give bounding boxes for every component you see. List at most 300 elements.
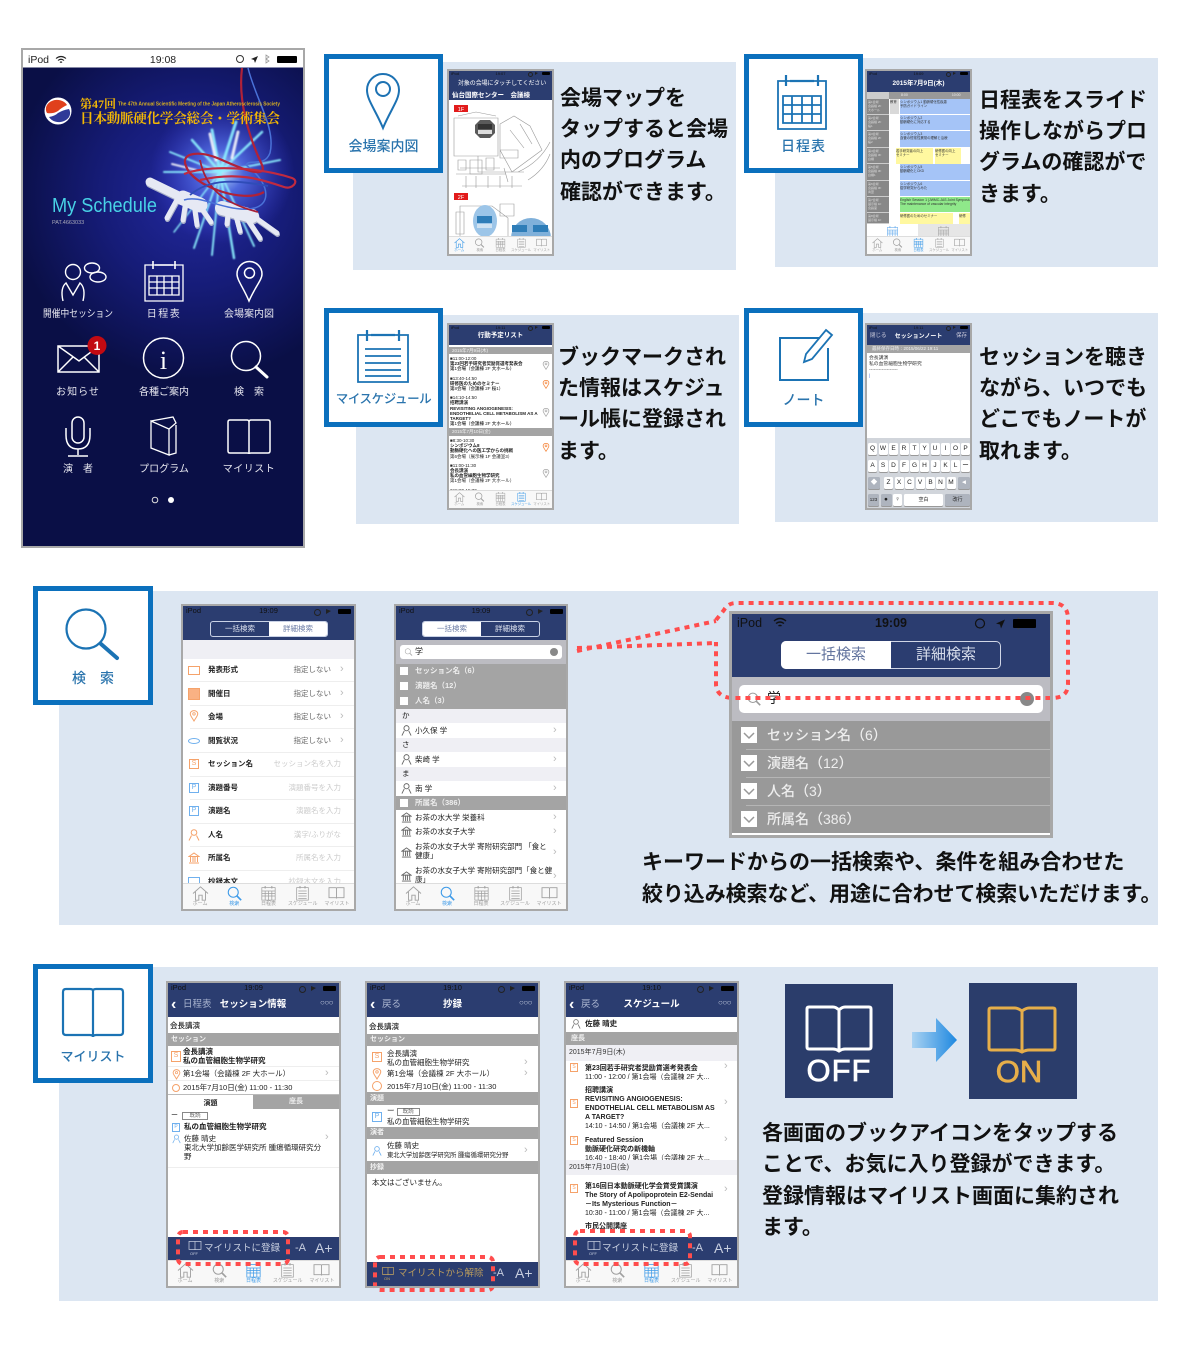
phone: venue map screen [447,69,554,256]
phone: timetable screen: 研修 [959,214,966,218]
panel: notes [775,313,1158,522]
icon: mail with badge: 1 [94,339,101,353]
phone: notes screen: ------------------ [869,368,898,373]
icon: search [232,342,267,377]
phone: speaker schedule screen: 10:30 - 11:00 / 第1会場（会議棟 2F 大... [585,1210,709,1217]
phone: notes screen: B [928,479,933,486]
text: timetable description [979,88,1147,206]
phone: abstract screen: › [524,1056,528,1068]
phone: detailed search screen: マイリスト [324,901,349,907]
phone: notes screen: O [953,445,958,452]
phone: timetable screen: 第6会場 [868,182,879,186]
phone: keyword search screen: 健康」 [415,851,438,860]
icon box: timetable [744,54,863,173]
phone: session info screen: 日程表 [183,999,212,1010]
phone: detailed search screen: 指定しない [294,712,331,721]
status bar: iPod [28,54,49,66]
phone: detailed search screen: 演題名 [208,806,230,815]
phone: timetable screen: 日程表 [913,248,924,252]
phone: my schedule screen: 2015年7月10日(金) [452,429,491,434]
phone: speaker schedule screen: 16:40 - 18:40 / 第1会場（会議棟 2F 大... [585,1155,710,1162]
phone: my schedule screen: 行動予定リスト [478,332,523,339]
phone: timetable screen: 白橿1 [868,173,876,177]
phone: venue map screen: 19:07 [495,71,506,76]
phone: notes screen: C [907,479,912,486]
phone: detailed search screen: 開催日 [208,689,230,698]
phone: detailed search screen: 指定しない [294,665,331,674]
icon: bookmark off [785,984,893,1098]
phone: my schedule screen: 研修医のためのセミナー [450,381,500,386]
phone: notes screen: X [897,479,901,486]
phone: timetable screen: 8:00 10:00 [901,93,961,97]
phone: timetable screen: 動脈硬化とCKD [900,169,924,173]
phone: timetable screen: 研修医のためのセミナー [900,214,937,218]
phone: speaker schedule screen: 第16回日本動脈硬化学会賞受賞講演 [585,1183,698,1190]
icon: program booklet [151,417,176,455]
phone: detailed search screen: S [192,760,196,767]
enlarged search screen: 人名（3） [767,783,831,799]
phone: timetable screen: シンポジウム5 [900,164,922,168]
phone: speaker schedule screen: マイリスト [707,1278,732,1284]
phone: timetable screen: シンポジウム3 [900,132,922,136]
phone: speaker schedule screen: The Story of Apolipoprotein E2-Sendai [585,1192,713,1199]
phone: notes screen [865,323,972,510]
phone: notes screen: T [912,445,916,452]
phone: my schedule screen: TARGET? [450,416,471,421]
phone: detailed search screen: P [192,807,196,814]
phone: detailed search screen: 発表形式 [208,665,238,674]
text: my schedule description [558,346,726,463]
phone: my schedule screen: ENDOTHELIAL CELL METABOLISM AS A [450,411,538,416]
phone: abstract screen: A+ [515,1265,533,1281]
icon box: my schedule [324,308,443,427]
phone: my schedule screen: ■15:00-15:30 [450,488,477,493]
phone: session info screen: 演題 [204,1100,218,1107]
phone: notes screen: P [963,445,968,452]
panel: search [59,591,1158,925]
phone: keyword search screen: さ [402,740,410,749]
phone: my schedule screen: シンポジウム8 [450,443,480,448]
phone: detailed search screen: スケジュール [288,901,318,907]
phone: session info screen: 19:09 [244,983,263,992]
phone: session info screen: 会長講演 [170,1021,200,1030]
phone: notes screen: Y [922,445,927,452]
text: venue map description: 確認ができます。 [560,181,726,204]
phone: notes screen: S [881,462,885,469]
phone: keyword search screen: ま [402,769,410,778]
phone: abstract screen: P [375,1113,379,1120]
phone: speaker schedule screen: › [724,1133,728,1145]
text: my list description: ことで、お気に入り登録ができます。 [762,1153,1115,1176]
icon box: my schedule: マイスケジュール [336,392,431,406]
phone: speaker schedule screen: スケジュール [671,1278,701,1284]
phone: speaker schedule screen: ホーム [576,1278,591,1284]
phone: timetable screen: 会議棟 2F [868,104,881,108]
phone: timetable screen: 第5会場 [868,165,879,169]
phone: venue map screen: 1F [458,107,465,113]
phone: detailed search screen: 会場 [208,712,223,721]
phone: notes screen: セッションノート [895,334,942,340]
phone: speaker schedule screen: -A [692,1242,703,1254]
phone: abstract screen: ー 既読 [387,1106,414,1115]
label: 検 索 [234,385,264,398]
phone: notes screen: ◆ [871,479,877,486]
phone: my schedule screen: 19:11 [496,325,505,330]
phone: timetable screen: 2015年7月9日(木) [892,80,945,87]
icon box: notes [744,308,863,427]
phone: detailed search screen [181,604,356,911]
phone: abstract screen: › [524,1144,528,1156]
label: 日程表 [147,308,181,320]
phone: timetable screen: 会議棟 3F [868,186,881,190]
phone: my schedule screen: 動脈硬化への医工学からの挑戦 [450,448,513,453]
icon box: search [33,586,153,705]
phone: session info screen: 野 [184,1152,192,1161]
phone: notes screen: 19:11 [914,325,923,330]
phone: abstract screen [365,981,540,1288]
phone: my schedule screen: ■8:30-10:30 [450,438,474,443]
phone: notes screen: 123 [870,497,877,502]
text: timetable description: きます。 [979,183,1061,206]
phone: speaker schedule screen: スケジュール [623,999,680,1010]
phone: venue map screen: 2F [458,195,465,201]
text: notes description [979,346,1147,463]
phone: notes screen: N [938,479,943,486]
phone: my schedule screen: REVISITING ANGIOGENESIS: [450,406,513,411]
phone: abstract screen: 19:10 [443,983,462,992]
phone: notes screen: G [912,462,917,469]
text: notes description: 取れます。 [979,440,1082,463]
phone: session info screen: ー [171,1112,178,1119]
phone: speaker schedule screen: S [572,1185,576,1191]
phone: speaker schedule screen: 戻る [581,999,600,1010]
label: 開催中セッション [43,307,113,320]
phone: abstract screen: セッション [370,1036,405,1043]
phone: timetable screen: 桜1 [868,124,873,128]
phone: notes screen: H [922,462,927,469]
icon: current sessions [62,263,106,301]
phone: keyword search screen: ホーム [406,901,420,907]
phone: venue map screen: ホーム [454,248,464,252]
phone: speaker schedule screen: A TARGET? [585,1114,624,1121]
phone: keyword search screen: 演題名（12） [415,681,461,690]
phone: notes screen: | [869,374,870,379]
phone: speaker schedule screen: S [572,1137,576,1143]
phone: detailed search screen: 漢字/ふりがな [294,830,341,839]
phone: detailed search screen: 閲覧状況 [208,736,238,745]
phone: detailed search screen: › [340,734,344,746]
text: my schedule description: ブックマークされ [558,346,726,369]
phone: timetable screen: 会議室 [868,206,877,210]
enlarged search screen: 詳細検索 [916,646,976,663]
phone: abstract screen: S [375,1053,379,1060]
enlarged search screen: 19:09 [875,616,907,630]
phone: timetable screen: 教育 [890,100,897,104]
phone: detailed search screen: 19:09 [259,606,278,615]
phone: detailed search screen: › [340,663,344,675]
phone: timetable screen: 第8会場 [868,214,879,218]
icon: information: i [160,346,167,375]
phone: abstract screen: 会長講演 [369,1022,399,1031]
phone: speaker schedule screen: › [724,1060,728,1072]
phone: session info screen: ‹ [171,996,176,1013]
phone: session info screen: マイリストに登録 [204,1243,280,1254]
phone: notes screen: 会長講演 [869,356,888,361]
phone: detailed search screen: 演題番号を入力 [288,783,341,792]
phone: abstract screen: マイリストから解除 [398,1268,484,1279]
phone: my schedule screen: 2015年7月9日(木) [452,348,488,353]
phone: timetable screen: 血管の恒常性異常の理解と治療 [900,136,947,140]
phone: my schedule screen: 第1会場（会議棟 2F 大ホール） [450,478,514,483]
phone: keyword search screen [394,604,568,911]
phone: speaker schedule screen: ○○○ [718,998,731,1007]
icon box: my list [33,964,153,1083]
phone: detailed search screen: › [340,687,344,699]
phone: timetable screen: シンポジウム1 動脈硬化性疾患 [900,100,947,104]
phone: keyword search screen: 小久保 学 [415,726,447,735]
phone: notes screen: ● [884,496,888,503]
phone: abstract screen: ‹ [370,996,375,1013]
phone: speaker schedule screen: Featured Session [585,1137,643,1144]
label: 会場案内図 [224,307,274,320]
phone: notes screen: D [891,462,896,469]
phone: detailed search screen: セッション名を入力 [274,759,341,768]
phone: my schedule screen: 私の血管細胞生物学研究 [450,473,500,478]
enlarged search screen [729,611,1053,838]
text: venue map description: 会場マップを [560,87,686,110]
phone: keyword search screen: お茶の水女子大学 寄附研究部門「食と健 [415,866,552,875]
phone: session info screen: 座長 [289,1098,303,1105]
phone: session info screen: 既読 [189,1113,200,1119]
phone: timetable screen [865,69,972,256]
text: timetable description: 操作しながらプロ [979,120,1147,143]
phone: session info screen: › [325,1131,329,1143]
phone: timetable screen: シンポジウム2 [900,116,922,120]
phone: detailed search screen: 抄録本文を入力 [288,877,341,886]
phone: timetable screen: 会議棟 2F [868,136,881,140]
phone: abstract screen: iPod [370,983,385,992]
phone: session info screen: 検索 [214,1278,224,1284]
text: notes description: どこでもノートが [979,408,1146,431]
enlarged search screen: 所属名（386） [767,811,860,827]
phone: timetable screen: 研修医の向上 [935,148,955,152]
phone: keyword search screen: 19:09 [472,606,490,615]
phone: speaker schedule screen: ENDOTHELIAL CELL METABOLISM AS [585,1105,715,1112]
phone: notes screen: ー [962,462,969,469]
phone: keyword search screen: 詳細検索 [495,624,525,633]
phone: venue map screen: iPod [451,71,459,76]
phone: speaker schedule screen: 動脈硬化研究の新機軸 [585,1146,655,1153]
phone: timetable screen: 展示棟 1F [868,218,881,222]
phone: detailed search screen: 所属名 [208,853,230,862]
icon box: venue map: 会場案内図 [348,138,418,154]
text: my list description [762,1122,1119,1239]
phone: abstract screen: 第1会場（会議棟 2F 大ホール） [387,1069,494,1078]
phone: keyword search screen: 柴崎 学 [415,755,440,764]
phone: session info screen: OFF [190,1251,198,1256]
phone: notes screen: W [880,445,886,452]
phone: abstract screen: 2015年7月10日(金) 11:00 - 11:30 [387,1082,496,1091]
my schedule heading [52,195,157,226]
phone: speaker schedule screen: REVISITING ANGIOGENESIS: [585,1096,683,1103]
phone: detailed search screen: 日程表 [261,901,276,907]
phone: timetable screen: スケジュール [929,248,949,252]
phone: detailed search screen: 指定しない [294,736,331,745]
phone: my schedule screen: 第8会場（会議棟 2F 桜1） [450,386,503,391]
phone: speaker schedule screen: －Its Mysterious Function－ [585,1201,678,1208]
phone: notes screen: R [902,445,906,452]
phone: keyword search screen: マイリスト [536,901,562,907]
phone: timetable screen: セミナー [935,153,949,157]
phone: detailed search screen: 所属名を入力 [296,853,341,862]
phone: speaker schedule screen: A+ [714,1240,732,1256]
text: my list description: ます。 [762,1216,823,1239]
label: お知らせ [56,385,100,398]
phone: abstract screen: 演題 [370,1095,384,1102]
my schedule heading: My Schedule [52,195,157,217]
phone: my schedule screen: ■11:00-12:00 [450,356,476,361]
phone: timetable screen: ホーム [872,248,882,252]
phone: notes screen: 最終保存日時：2015/06/22 19:11 [872,346,938,351]
text: timetable description: グラムの確認がで [979,151,1146,174]
conference title [80,96,280,127]
phone: abstract screen: -A [493,1267,504,1279]
phone: keyword search screen: 所属名（386） [415,798,465,807]
text: search description: 絞り込み検索など、用途に合わせて検索いただけます。 [642,883,1161,906]
enlarged search screen: セッション名（6） [767,727,887,743]
phone: timetable screen: 19:09 [913,71,924,76]
phone: detailed search screen: P [192,784,196,791]
phone: timetable screen: マイリスト [951,248,968,252]
enlarged search screen: 一括検索 [806,646,866,663]
phone: speaker schedule screen: › [724,1096,728,1108]
text: my list description: 各画面のブックアイコンをタップする [762,1122,1118,1145]
conference title: 第47回 [80,96,116,111]
phone: session info screen: iPod [171,983,186,992]
phone: my schedule screen: 招聘講演 [450,400,468,405]
phone: detailed search screen: ホーム [193,901,208,907]
phone: my schedule screen: 第23回若手研究者奨励賞選考発表会 [450,361,523,366]
my schedule heading: PAT.4663033 [52,220,84,226]
phone: abstract screen: 私の血管細胞生物学研究 [387,1058,470,1067]
icon box: search: 検 索 [72,670,114,686]
text: search description: キーワードからの一括検索や、条件を組み合わせた [642,851,1124,874]
enlarged search screen: iPod [737,616,762,630]
phone: session info screen [166,981,341,1288]
icon box: my list: マイリスト [60,1049,126,1064]
page indicator [152,497,174,503]
phone: my schedule screen: ■11:00-11:30 [450,463,476,468]
phone: timetable screen: セミナー [896,153,910,157]
phone: detailed search screen: 指定しない [294,689,331,698]
phone: notes screen: 空白 [918,497,928,503]
phone: timetable screen: 第1会場 [868,100,879,104]
phone: notes screen: U [933,445,937,452]
phone: my schedule screen [447,323,554,510]
phone: speaker schedule screen: 11:00 - 12:00 / 第1会場（会議棟 2F 大... [585,1074,709,1081]
phone: speaker schedule screen: 招聘講演 [585,1087,613,1094]
phone: keyword search screen: › [553,724,557,736]
phone: detailed search screen: iPod [186,606,201,615]
phone: my schedule screen: 会長講演 [450,468,468,473]
text: venue map description: 内のプログラム [560,149,706,172]
phone: keyword search screen: か [402,711,410,720]
phone: notes screen: ♀ [895,496,900,503]
phone: timetable screen: 大ホール [868,108,880,112]
phone: session info screen: 2015年7月10日(金) 11:00 - 11:30 [183,1083,292,1092]
phone: keyword search screen: › [553,870,557,882]
icon: venue map [237,262,262,301]
text: my schedule description: た情報はスケジュ [558,377,725,400]
phone: timetable screen: 疫学研究からみた [900,186,927,190]
phone: speaker schedule screen: 検索 [612,1278,622,1284]
phone: keyword search screen: お茶の水女子大学 寄附研究部門 「食と [415,842,547,851]
enlarged search screen: 学 [767,690,781,706]
icon: microphone [66,417,90,456]
phone: abstract screen: ON [384,1276,390,1281]
phone: abstract screen: 抄録 [370,1164,384,1171]
icon box: notes: ノート [782,392,824,408]
phone: my schedule screen: ホーム [454,502,464,506]
phone: speaker schedule screen: 14:10 - 14:50 / 第1会場（会議棟 2F 大... [585,1123,710,1130]
phone: notes screen: A [870,462,875,469]
phone: session info screen: 私の血管細胞生物学研究 [183,1056,266,1065]
phone: my schedule screen: 第6会場（展示棟 1F 会議室3） [450,454,512,459]
phone: timetable screen: 白橿 [868,157,874,161]
phone: timetable screen: 会議棟 2F [868,120,881,124]
phone: keyword search screen: 康」 [415,875,430,884]
phone: my schedule screen: 第1会場（会議棟 2F 大ホール） [450,366,514,371]
phone: keyword search screen: › [553,782,557,794]
status bar [21,48,305,68]
phone: abstract screen: 佐藤 晴史 [387,1141,419,1150]
phone: abstract screen: 私の血管細胞生物学研究 [387,1117,470,1126]
label: 各種ご案内 [139,385,189,398]
phone: keyword search screen: お茶の水女子大学 [415,827,475,836]
phone: keyword search screen: › [553,811,557,823]
phone: keyword search screen: 検索 [442,901,452,907]
phone: speaker schedule screen: 2015年7月10日(金) [569,1164,629,1171]
phone: notes screen: J [933,462,937,469]
phone: timetable screen: 会議棟 3F [868,169,881,173]
phone: notes screen: iPod [869,325,877,330]
phone: session info screen: 佐藤 晴史 [184,1134,216,1143]
phone: keyword search screen: セッション名（6） [415,666,479,675]
text: search description [642,850,1161,906]
icon: my list [228,420,270,454]
phone: venue map screen: マイリスト [533,248,550,252]
phone: speaker schedule screen: 市民公開講座 [585,1223,627,1230]
phone: venue map screen: 日程表 [495,248,506,252]
phone: main home screen [21,48,305,548]
phone: keyword search screen: スケジュール [500,901,530,907]
phone: notes screen: 保存 [956,333,967,339]
phone: notes screen: L [954,462,957,469]
conference title: 日本動脈硬化学会総会・学術集会 [80,110,280,127]
phone: session info screen: › [325,1067,329,1079]
panel: venue map [353,62,736,270]
enlarged search screen: 演題名（12） [767,755,853,771]
phone: keyword search screen: 人名（3） [415,696,449,705]
phone: timetable screen: 動脈硬化に対応する [900,120,931,124]
conference logo [44,98,72,124]
phone: timetable screen: 第4会場 [868,149,879,153]
phone: detailed search screen: 人名 [208,830,223,839]
phone: notes screen: Z [886,479,890,486]
icon: bookmark off: OFF [806,1053,872,1088]
phone: keyword search screen: iPod [399,606,414,615]
phone: keyword search screen: 学 [415,647,423,656]
